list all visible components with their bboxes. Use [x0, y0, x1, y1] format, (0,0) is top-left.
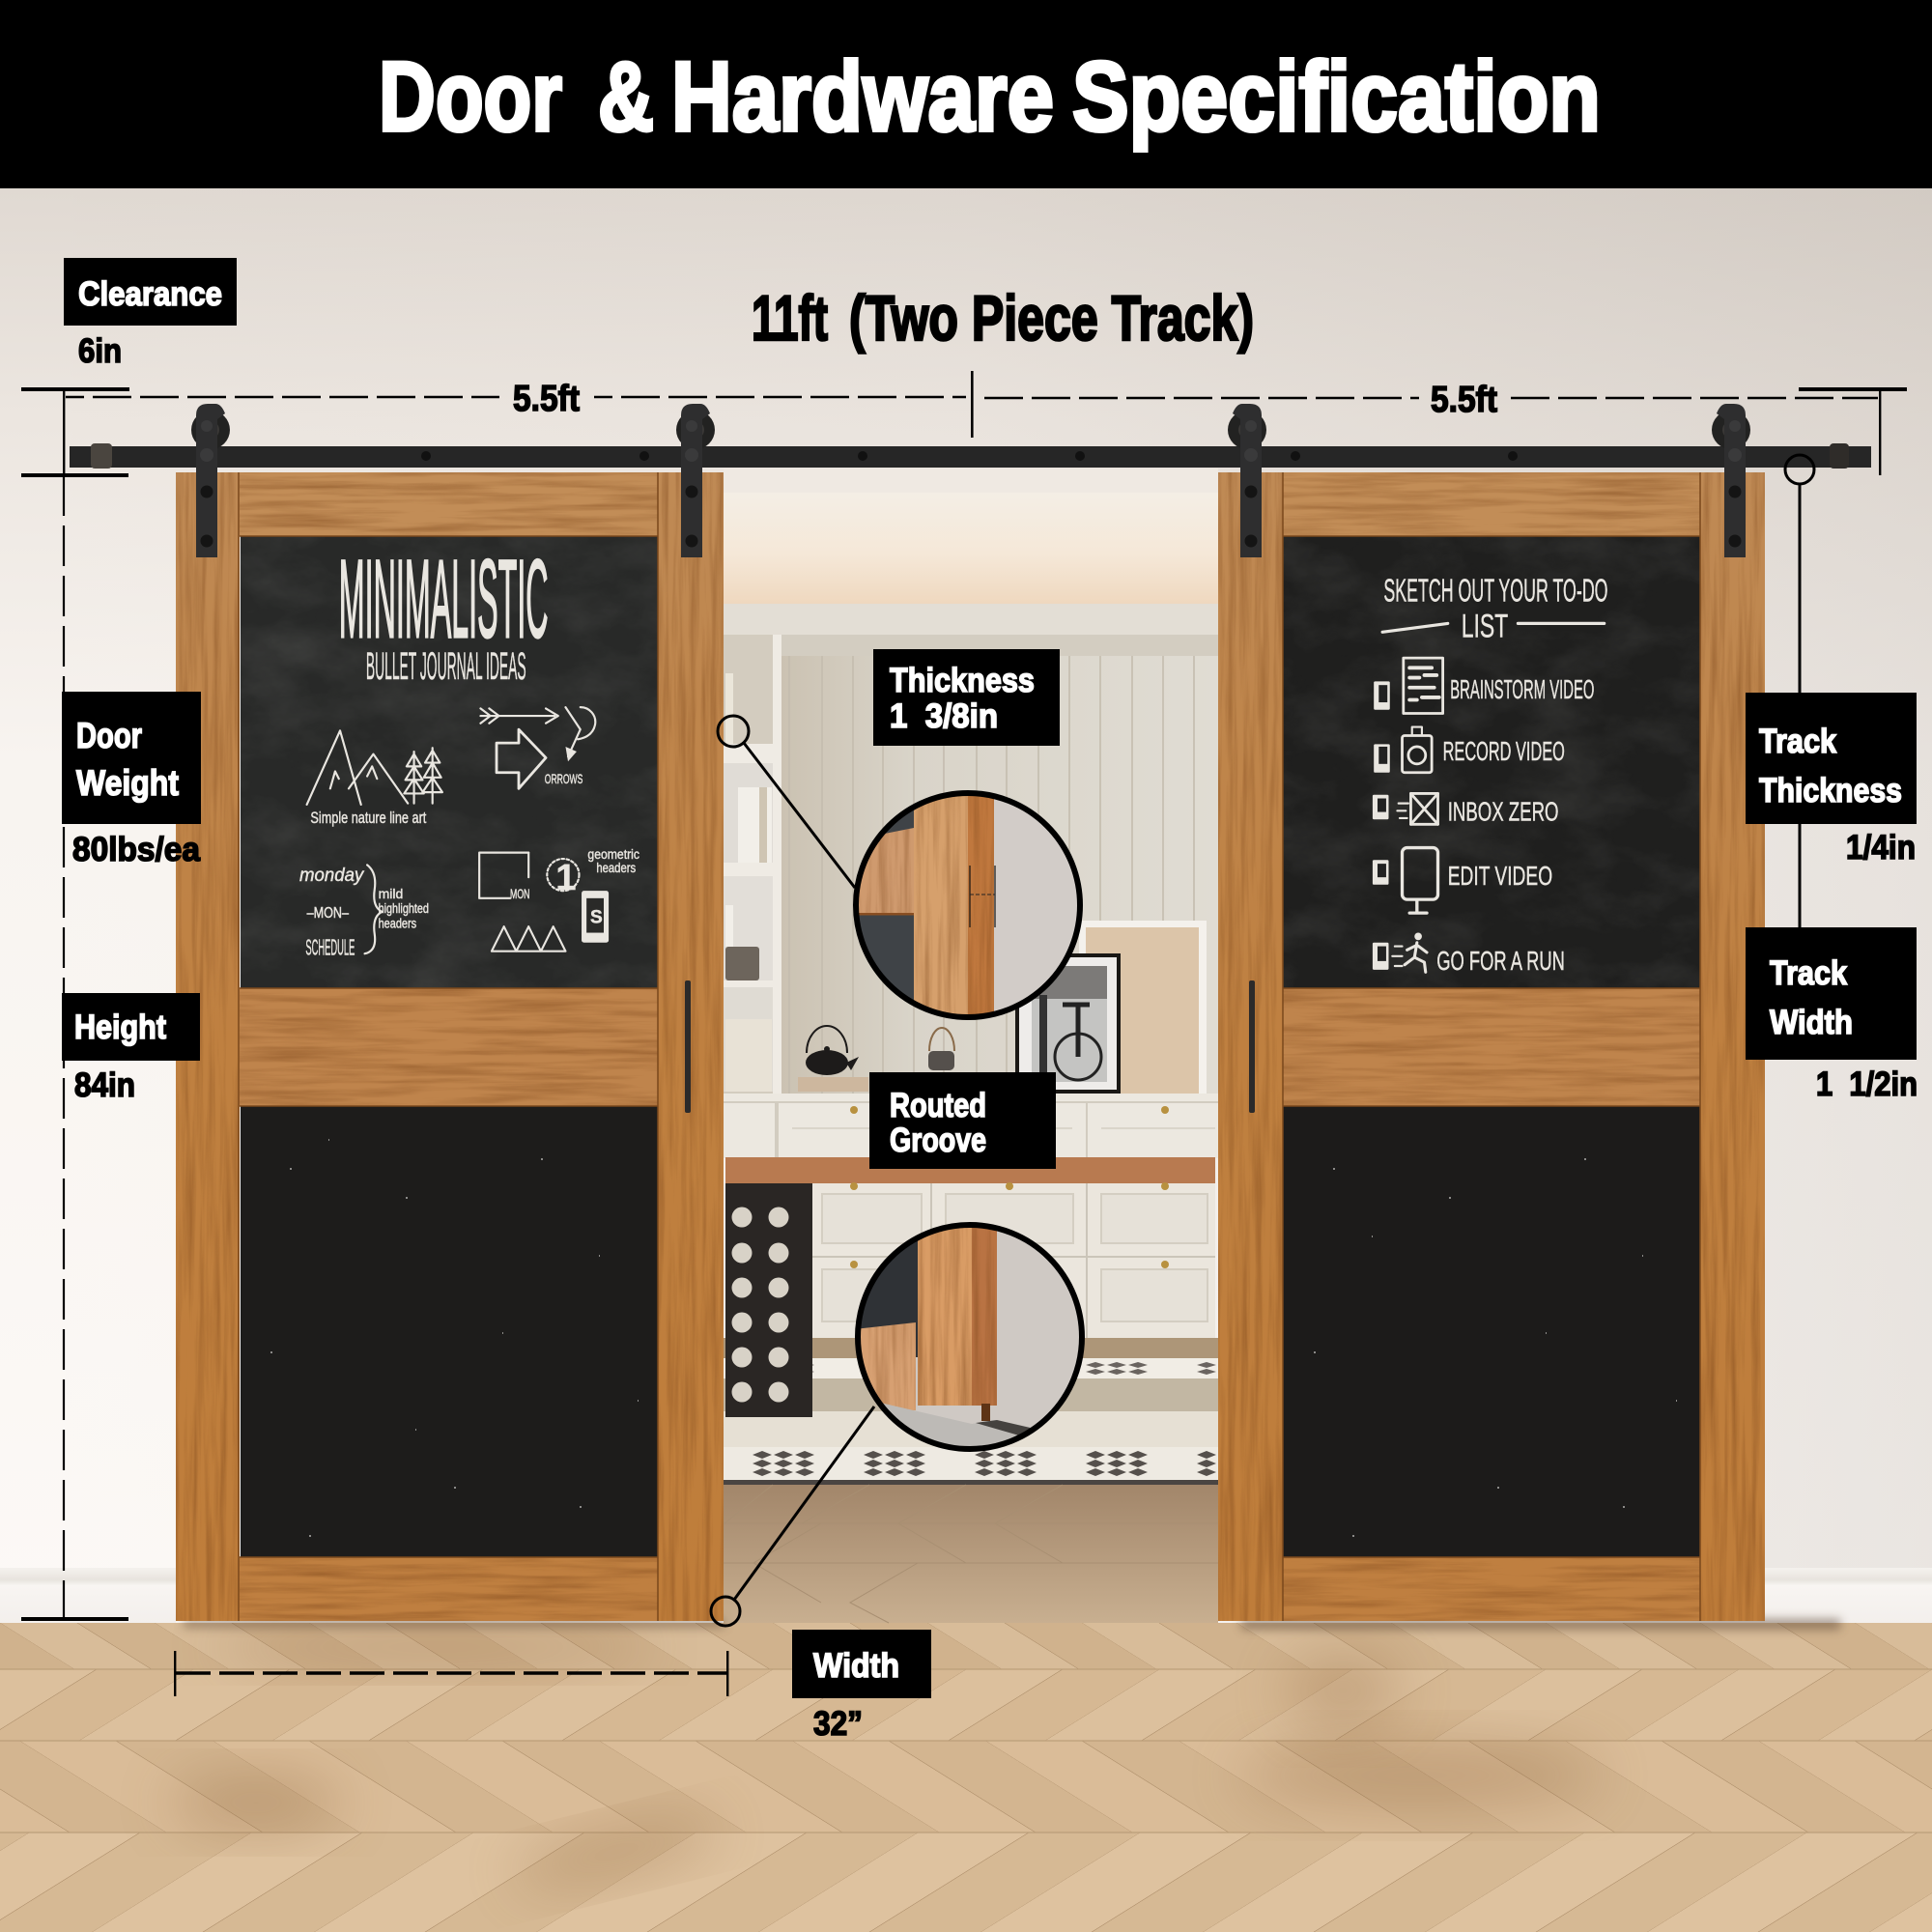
- label: track width: [1746, 927, 1918, 1103]
- title banner: &: [598, 42, 654, 152]
- list item: record video: RECORD VIDEO: [1443, 736, 1565, 766]
- track length heading: (Two Piece Track): [849, 282, 1254, 354]
- teapots: [798, 1026, 954, 1092]
- rug: [724, 1358, 1218, 1485]
- left end stop: [91, 443, 112, 469]
- chalk list title: [1382, 608, 1605, 644]
- label: width: [792, 1630, 931, 1743]
- countertop: [725, 1157, 1215, 1183]
- chalk geometric headers: [479, 846, 639, 952]
- label: track thickness: Track: [1759, 723, 1836, 760]
- bottom rail: [240, 1557, 658, 1621]
- lower chalkboard panel: [1283, 1106, 1700, 1557]
- chalk mountains and trees: [307, 730, 442, 827]
- door handle: [685, 980, 691, 1113]
- label: height: [62, 993, 200, 1104]
- list item: brainstorm video: [1374, 658, 1594, 714]
- title banner: Specification: [1072, 42, 1601, 152]
- list item: inbox zero: INBOX ZERO: [1448, 796, 1559, 826]
- right chalkboard drawings: [1373, 573, 1608, 976]
- chalk heading: SKETCH OUT YOUR TO-DO: [1383, 573, 1608, 609]
- hanger 4: [1712, 404, 1750, 557]
- center tick: [971, 371, 974, 438]
- right door: [1218, 472, 1765, 1621]
- list item: record video: [1374, 727, 1565, 773]
- label: height: 84in: [74, 1066, 135, 1104]
- detail circle: routed groove: [855, 1222, 1087, 1459]
- bottom rail: [1283, 1557, 1700, 1621]
- left stile: [176, 472, 240, 1621]
- middle rail: [240, 988, 658, 1106]
- list item: inbox zero: [1373, 793, 1559, 826]
- label: track thickness: 1/4in: [1846, 829, 1916, 867]
- chalk list title: LIST: [1462, 608, 1508, 644]
- chalk schedule: highlighted: [379, 900, 429, 916]
- framed bicycle photo: [1015, 953, 1121, 1094]
- back floor strip: [724, 1338, 1218, 1359]
- title banner: Door: [379, 42, 562, 152]
- chalk schedule: monday: [299, 866, 365, 886]
- sliding track rail: [70, 443, 1871, 469]
- text: MINIMALISTIC: [339, 537, 549, 661]
- title banner: [0, 0, 1932, 188]
- chalk geometric headers: headers: [596, 860, 636, 875]
- hanger 3: [1228, 404, 1266, 557]
- list item: brainstorm video: BRAINSTORM VIDEO: [1450, 674, 1594, 704]
- hanger 1: [191, 404, 230, 557]
- label: thickness: [873, 649, 1060, 746]
- chalk mountains and trees: Simple nature line art: [310, 809, 427, 827]
- chalk schedule: [299, 865, 429, 960]
- top rail: [240, 472, 658, 536]
- chalk geometric headers: MON: [510, 886, 529, 901]
- chalk geometric headers: S: [590, 907, 603, 927]
- title banner: Hardware: [671, 42, 1054, 152]
- left clearance and height dimension: [21, 387, 129, 1621]
- framed art: [1079, 921, 1207, 1094]
- detail circle: door thickness: [850, 787, 1092, 1024]
- right clearance dimension: [1799, 387, 1907, 475]
- lower chalkboard panel: [241, 1106, 658, 1557]
- label: door weight: Door: [76, 716, 142, 755]
- chalk arrows: [480, 707, 595, 788]
- right stile: [658, 472, 724, 1621]
- back wall panelling: [781, 635, 1218, 1094]
- left stile: [1218, 472, 1283, 1621]
- chalk schedule: headers: [379, 915, 416, 930]
- track length heading: 11ft: [752, 282, 828, 354]
- top dimension line: left half: 5.5ft: [513, 379, 580, 419]
- chalk geometric headers: 1: [555, 857, 577, 898]
- label: track thickness: [1746, 693, 1917, 867]
- list item: edit video: [1373, 848, 1552, 913]
- label: routed groove: [869, 1072, 1056, 1169]
- shelving unit: [724, 635, 781, 1098]
- right end stop: [1830, 443, 1849, 469]
- label: thickness: Thickness: [890, 662, 1035, 699]
- leader: width / groove: [711, 1406, 874, 1626]
- label: clearance: [64, 258, 237, 370]
- track callout leader: [1785, 455, 1814, 1060]
- label: track width: Width: [1770, 1004, 1853, 1041]
- label: track width: 1 1/2in: [1816, 1065, 1918, 1103]
- chalk schedule: SCHEDULE: [305, 935, 355, 960]
- top rail: [1283, 472, 1700, 536]
- upper cabinets: [724, 1094, 1218, 1158]
- door handle: [1249, 980, 1255, 1113]
- label: routed groove: Routed: [890, 1087, 986, 1124]
- room floor: [724, 1485, 1218, 1623]
- interior room seen through the opening: [724, 469, 1218, 1623]
- label: door weight: Weight: [76, 763, 179, 803]
- left door: [176, 472, 724, 1621]
- wall background: [0, 188, 1932, 1628]
- list item: edit video: EDIT VIDEO: [1448, 861, 1552, 891]
- upper chalkboard panel: [1283, 536, 1700, 988]
- track length heading: [752, 282, 1254, 354]
- upper chalkboard panel: [241, 536, 658, 988]
- label: door weight: [62, 692, 201, 868]
- list item: go for a run: [1373, 933, 1565, 976]
- baseboard: [0, 1568, 1932, 1623]
- label: routed groove: Groove: [890, 1122, 986, 1159]
- middle rail: [1283, 988, 1700, 1106]
- left chalkboard drawings: [299, 537, 639, 960]
- width dimension: [174, 1651, 728, 1696]
- label: thickness: 1 3/8in: [890, 697, 998, 735]
- label: track thickness: Thickness: [1759, 772, 1902, 810]
- label: width: Width: [813, 1647, 899, 1685]
- top dimension line: right half: 5.5ft: [1431, 380, 1497, 420]
- lintel and ceiling: [724, 469, 1218, 604]
- herringbone floor: [0, 1623, 1932, 1932]
- crown molding: [724, 604, 1218, 635]
- label: door weight: 80lbs/ea: [72, 831, 201, 868]
- label: clearance: Clearance: [78, 275, 222, 313]
- door shadows on floor: [184, 1619, 1840, 1630]
- label: clearance: 6in: [78, 332, 122, 370]
- hanger 2: [676, 404, 715, 557]
- chalk schedule: –MON–: [307, 905, 349, 922]
- label: width: 32”: [813, 1705, 863, 1743]
- leader: thickness: [718, 716, 855, 888]
- chalk schedule: mild: [379, 886, 403, 901]
- chalk arrows: ORROWS: [545, 771, 582, 786]
- label: track width: Track: [1770, 954, 1847, 992]
- list item: go for a run: GO FOR A RUN: [1436, 946, 1565, 976]
- chalk geometric headers: geometric: [587, 846, 639, 862]
- left chalkboard drawings: BULLET JOURNAL IDEAS: [366, 645, 526, 688]
- lower cabinets: [725, 1182, 1215, 1338]
- label: height: Height: [74, 1009, 166, 1046]
- perforated black stand: [725, 1183, 812, 1417]
- right stile: [1700, 472, 1765, 1621]
